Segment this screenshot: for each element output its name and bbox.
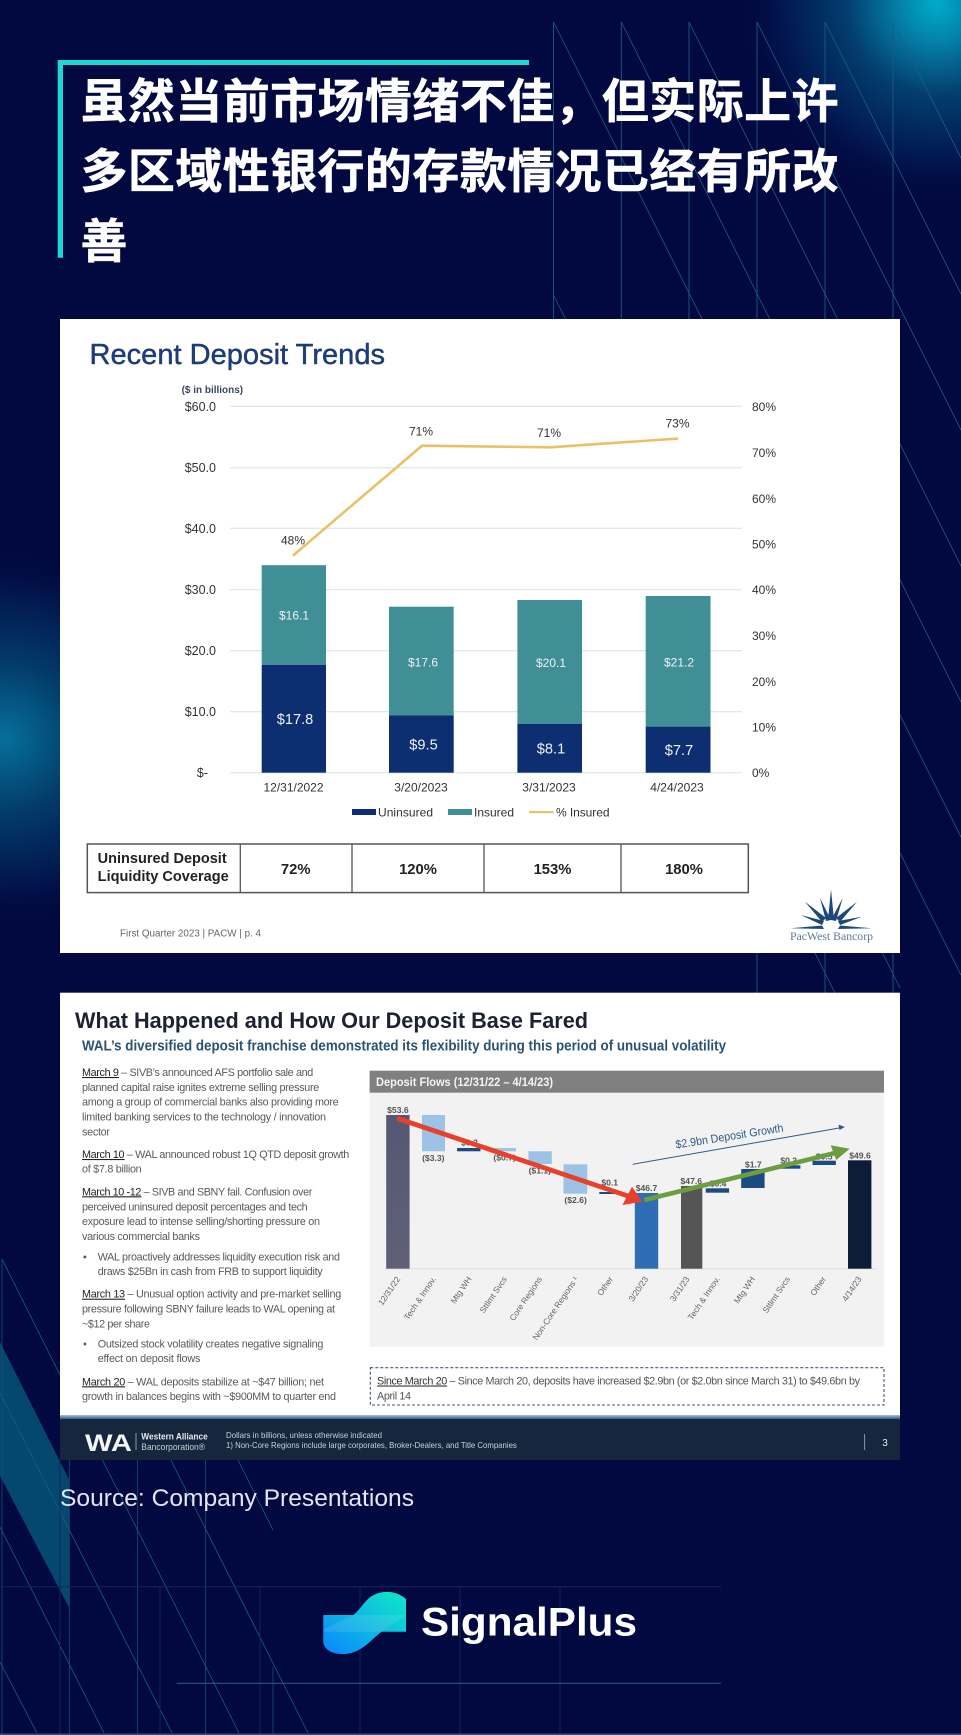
stacked bar and line chart: $7.7 bbox=[665, 743, 693, 759]
panel heading: Recent Deposit Trends bbox=[90, 339, 385, 371]
deposit flows waterfall chart: 12/31/22 bbox=[376, 1274, 402, 1307]
timeline text block: various commercial banks bbox=[82, 1231, 201, 1243]
deposit flows waterfall chart: ($2.6) bbox=[564, 1195, 587, 1205]
stacked bar and line chart: $16.1 bbox=[279, 608, 309, 622]
stacked bar and line chart: 10% bbox=[752, 720, 776, 734]
stacked bar and line chart: 71% bbox=[537, 426, 561, 440]
deposit flows waterfall chart: $53.6 bbox=[387, 1105, 409, 1115]
deposit flows waterfall chart: ($3.3) bbox=[422, 1153, 445, 1163]
panel subheading: WAL’s diversified deposit franchise demonstrated its flexibility during this period of unusual volatility bbox=[82, 1038, 726, 1054]
timeline text block: sector bbox=[82, 1126, 110, 1138]
stacked bar and line chart: 3/20/2023 bbox=[394, 780, 448, 794]
title: 善 bbox=[80, 203, 128, 272]
chart legend: Uninsured bbox=[378, 806, 433, 820]
stacked bar and line chart: $30.0 bbox=[185, 583, 216, 597]
page footnote: First Quarter 2023 | PACW | p. 4 bbox=[120, 928, 261, 940]
title frame accent bbox=[58, 60, 529, 258]
deposit flows waterfall chart: 4/14/23 bbox=[840, 1274, 864, 1303]
arrow: deposit growth: $2.9bn Deposit Growth bbox=[675, 1123, 784, 1151]
deposit flows waterfall chart: $46.7 bbox=[636, 1183, 657, 1193]
stacked bar and line chart: 71% bbox=[409, 424, 433, 438]
stacked bar and line chart: $50.0 bbox=[185, 461, 216, 475]
coverage table: 153% bbox=[534, 862, 571, 878]
icon: SignalPlus mark bbox=[323, 1592, 406, 1654]
stacked bar and line chart: 70% bbox=[752, 446, 776, 460]
stacked bar and line chart: 40% bbox=[752, 583, 776, 597]
stacked bar and line chart: $20.0 bbox=[185, 644, 216, 658]
timeline text block: March 10 – WAL announced robust 1Q QTD deposit growth bbox=[82, 1149, 349, 1161]
title: 多区域性银行的存款情况已经有所改 bbox=[80, 133, 838, 202]
stacked bar and line chart: 3/31/2023 bbox=[522, 780, 576, 794]
chart legend: Insured bbox=[474, 806, 514, 820]
stacked bar and line chart: 30% bbox=[752, 629, 776, 643]
icon: Western Alliance mark: WA bbox=[85, 1430, 132, 1457]
icon: PacWest sunburst logo: PacWest Bancorp bbox=[790, 929, 873, 943]
deposit flows waterfall chart: Deposit Flows (12/31/22 – 4/14/23) bbox=[376, 1077, 553, 1089]
timeline text block: perceived uninsured deposit percentages and tech bbox=[82, 1201, 308, 1213]
icon: PacWest sunburst logo bbox=[790, 889, 873, 943]
panel heading: What Happened and How Our Deposit Base Fared bbox=[75, 1008, 588, 1033]
stacked bar and line chart: ($ in billions) bbox=[182, 385, 243, 396]
panel: Western Alliance deposit base bbox=[60, 993, 900, 1460]
deposit flows waterfall chart: Mtg WH bbox=[448, 1275, 474, 1305]
coverage table: 120% bbox=[399, 862, 437, 878]
stacked bar and line chart: $20.1 bbox=[536, 656, 566, 670]
timeline text block: ~$12 per share bbox=[82, 1318, 150, 1330]
stacked bar and line chart: $17.6 bbox=[408, 656, 438, 670]
stacked bar and line chart: $40.0 bbox=[185, 522, 216, 536]
coverage table bbox=[87, 844, 748, 893]
chart legend: % Insured bbox=[556, 806, 610, 820]
deposit flows waterfall chart: Other bbox=[808, 1274, 828, 1297]
stacked bar and line chart: 73% bbox=[665, 416, 690, 430]
coverage table: Liquidity Coverage bbox=[98, 869, 229, 885]
timeline text block: March 10 -12 – SIVB and SBNY fail. Confusion over bbox=[82, 1186, 313, 1198]
stacked bar and line chart: $17.8 bbox=[277, 712, 313, 728]
arrow: green recovery bbox=[644, 1145, 850, 1200]
stacked bar and line chart: 12/31/2022 bbox=[263, 780, 324, 794]
coverage table: 180% bbox=[665, 862, 703, 878]
timeline text block: growth in balances begins with ~$900MM to quarter end bbox=[82, 1391, 336, 1403]
stacked bar and line chart: $21.2 bbox=[664, 656, 694, 670]
timeline text block: of $7.8 billion bbox=[82, 1164, 142, 1176]
deposit flows waterfall chart: $0.1 bbox=[601, 1178, 618, 1188]
coverage table: Uninsured Deposit bbox=[98, 851, 227, 867]
deposit flows waterfall chart: Tech & Innov. bbox=[686, 1275, 722, 1322]
deposit flows waterfall chart: ($0.7) bbox=[493, 1153, 516, 1163]
timeline text block: March 9 – SIVB’s announced AFS portfolio sale and bbox=[82, 1067, 313, 1079]
deposit flows waterfall chart: $1.7 bbox=[745, 1159, 762, 1169]
deposit flows waterfall chart: $0.3 bbox=[780, 1155, 797, 1165]
footer bar: 3 bbox=[882, 1438, 888, 1449]
stacked bar and line chart: $60.0 bbox=[185, 400, 216, 414]
timeline text block: among a group of commercial banks also providing more bbox=[82, 1097, 339, 1109]
timeline text block: pressure following SBNY failure leads to WAL opening at bbox=[82, 1304, 335, 1316]
deposit flows waterfall chart: 3/31/23 bbox=[668, 1274, 692, 1303]
deposit flows waterfall chart: $0.3 bbox=[461, 1138, 478, 1148]
deposit flows waterfall chart: Core Regions bbox=[507, 1275, 544, 1323]
deposit flows waterfall chart: Tech & Innov. bbox=[402, 1275, 438, 1322]
footer bar: Western Alliance bbox=[141, 1432, 208, 1442]
deposit flows waterfall chart: $47.6 bbox=[681, 1176, 702, 1186]
timeline text block: limited banking services to the technology / innovation bbox=[82, 1111, 326, 1123]
arrow: red decline bbox=[397, 1118, 642, 1205]
stacked bar and line chart: $- bbox=[197, 766, 208, 780]
timeline text block: March 20 – WAL deposits stabilize at ~$47 billion; net bbox=[82, 1376, 324, 1388]
deposit flows waterfall chart bbox=[370, 1071, 884, 1347]
timeline text block: planned capital raise ignites extreme selling pressure bbox=[82, 1082, 319, 1094]
stacked bar and line chart: 20% bbox=[752, 675, 776, 689]
timeline text block: effect on deposit flows bbox=[98, 1353, 201, 1365]
callout: since March 20 bbox=[370, 1368, 884, 1405]
stacked bar and line chart bbox=[182, 385, 776, 820]
stacked bar and line chart: 80% bbox=[752, 400, 776, 414]
callout: since March 20: Since March 20 – Since March 20, deposits have increased $2.9bn (or $2.0bn since March 31) to $49.6bn by bbox=[377, 1376, 861, 1388]
stacked bar and line chart: 48% bbox=[281, 534, 305, 548]
stacked bar and line chart: $9.5 bbox=[409, 738, 438, 754]
deposit flows waterfall chart: $49.6 bbox=[849, 1150, 871, 1160]
timeline text block: draws $25Bn in cash from FRB to support liquidity bbox=[98, 1266, 323, 1278]
deposit flows waterfall chart: $0.5 bbox=[816, 1152, 833, 1162]
source note: Source: Company Presentations bbox=[60, 1485, 414, 1512]
deposit flows waterfall chart: $0.4 bbox=[710, 1179, 727, 1189]
timeline text block: • bbox=[83, 1251, 87, 1263]
timeline text block: • bbox=[83, 1338, 87, 1350]
stacked bar and line chart: 50% bbox=[752, 538, 776, 552]
deposit flows waterfall chart: Sttlmt Svcs bbox=[477, 1275, 509, 1315]
timeline text block: WAL proactively addresses liquidity execution risk and bbox=[98, 1251, 340, 1263]
deposit flows waterfall chart: Other bbox=[595, 1274, 615, 1297]
deposit flows waterfall chart: Sttlmt Svcs bbox=[760, 1275, 792, 1315]
deposit flows waterfall chart: 3/20/23 bbox=[626, 1274, 650, 1303]
footer bar: Dollars in billions, unless otherwise indicated bbox=[226, 1430, 382, 1440]
deposit flows waterfall chart: Non-Core Regions ¹ bbox=[530, 1274, 580, 1342]
arrow: deposit growth bbox=[633, 1123, 845, 1164]
panel: recent deposit trends bbox=[60, 319, 900, 953]
stacked bar and line chart: 4/24/2023 bbox=[650, 780, 704, 794]
timeline text block: March 13 – Unusual option activity and pre-market selling bbox=[82, 1289, 341, 1301]
timeline text block: exposure lead to intense selling/shorting pressure on bbox=[82, 1216, 320, 1228]
timeline text block: Outsized stock volatility creates negative signaling bbox=[98, 1338, 323, 1350]
chart legend bbox=[352, 806, 610, 820]
deposit flows waterfall chart: ($1.1) bbox=[529, 1166, 551, 1176]
footer bar: Bancorporation® bbox=[141, 1442, 205, 1452]
SignalPlus logo: SignalPlus bbox=[421, 1600, 637, 1644]
deposit flows waterfall chart: Mtg WH bbox=[732, 1275, 757, 1305]
footer bar: 1) Non-Core Regions include large corporates, Broker-Dealers, and Title Companies bbox=[226, 1440, 517, 1450]
SignalPlus logo bbox=[323, 1592, 637, 1654]
stacked bar and line chart: $10.0 bbox=[185, 705, 216, 719]
stacked bar and line chart: 60% bbox=[752, 492, 776, 506]
title: 虽然当前市场情绪不佳，但实际上许 bbox=[80, 63, 838, 132]
footer bar bbox=[60, 1415, 900, 1460]
timeline text block bbox=[82, 1067, 349, 1403]
callout: since March 20: April 14 bbox=[377, 1390, 411, 1402]
coverage table: 72% bbox=[281, 862, 311, 878]
stacked bar and line chart: 0% bbox=[752, 766, 770, 780]
title bbox=[80, 63, 838, 272]
stacked bar and line chart: $8.1 bbox=[537, 742, 565, 758]
